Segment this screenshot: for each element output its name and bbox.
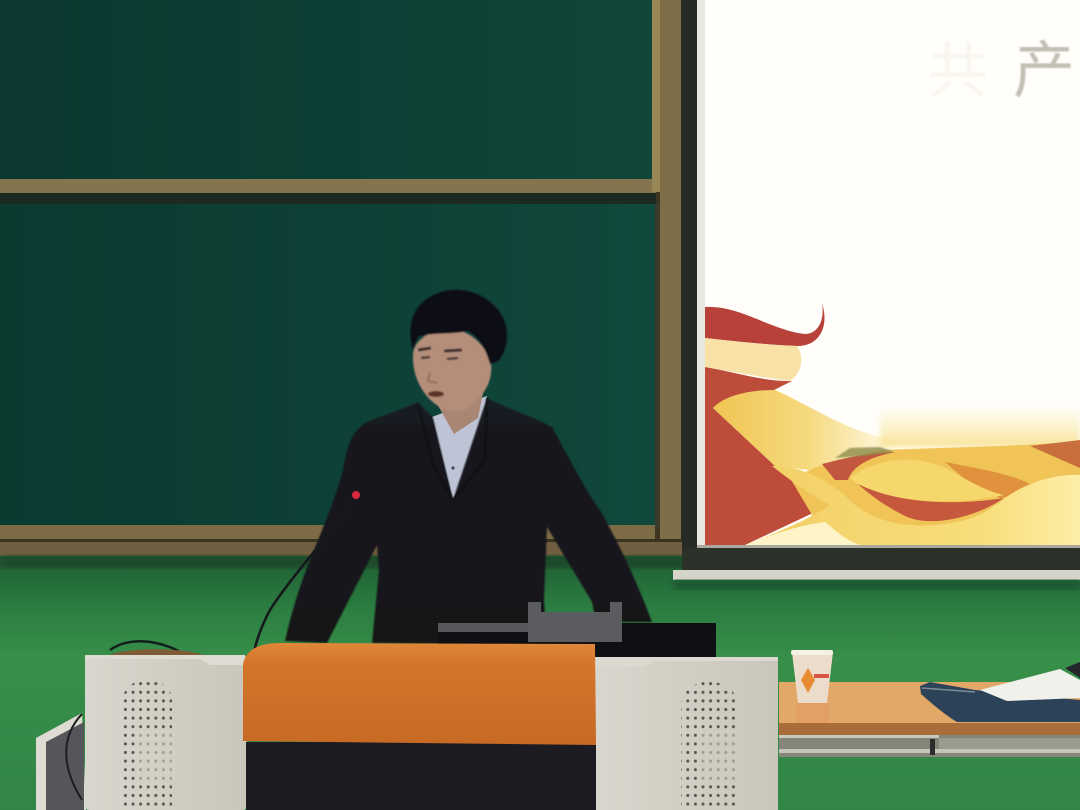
folder and paper on table — [920, 662, 1080, 722]
screen title fragment: 共 — [928, 23, 988, 110]
screen title fragment: 产 — [1013, 20, 1075, 110]
projection screen — [697, 0, 1080, 548]
podium dark front — [246, 742, 596, 810]
cable behind podium — [110, 641, 184, 654]
blackboard — [0, 0, 697, 568]
podium — [36, 643, 778, 810]
screen artwork: red and gold waves — [705, 303, 1080, 545]
left cabinet — [85, 655, 247, 810]
left wing — [36, 713, 86, 810]
microphone — [254, 491, 360, 652]
right cabinet — [595, 657, 778, 810]
monitor on podium — [438, 602, 716, 658]
shirt — [432, 396, 487, 500]
podium wooden top — [243, 643, 596, 745]
dark band below screen — [682, 548, 1080, 570]
neck — [436, 388, 484, 434]
suit jacket — [285, 398, 652, 645]
speaker — [285, 290, 652, 645]
wooden tray behind podium — [108, 649, 207, 656]
speaker holes — [124, 682, 172, 806]
green wall — [0, 556, 1080, 810]
screen title fragment — [928, 20, 1075, 110]
screen bottom bar — [673, 570, 1080, 580]
hair — [410, 290, 507, 364]
face — [410, 290, 507, 411]
side table — [779, 682, 1080, 757]
paper cup — [791, 650, 833, 703]
